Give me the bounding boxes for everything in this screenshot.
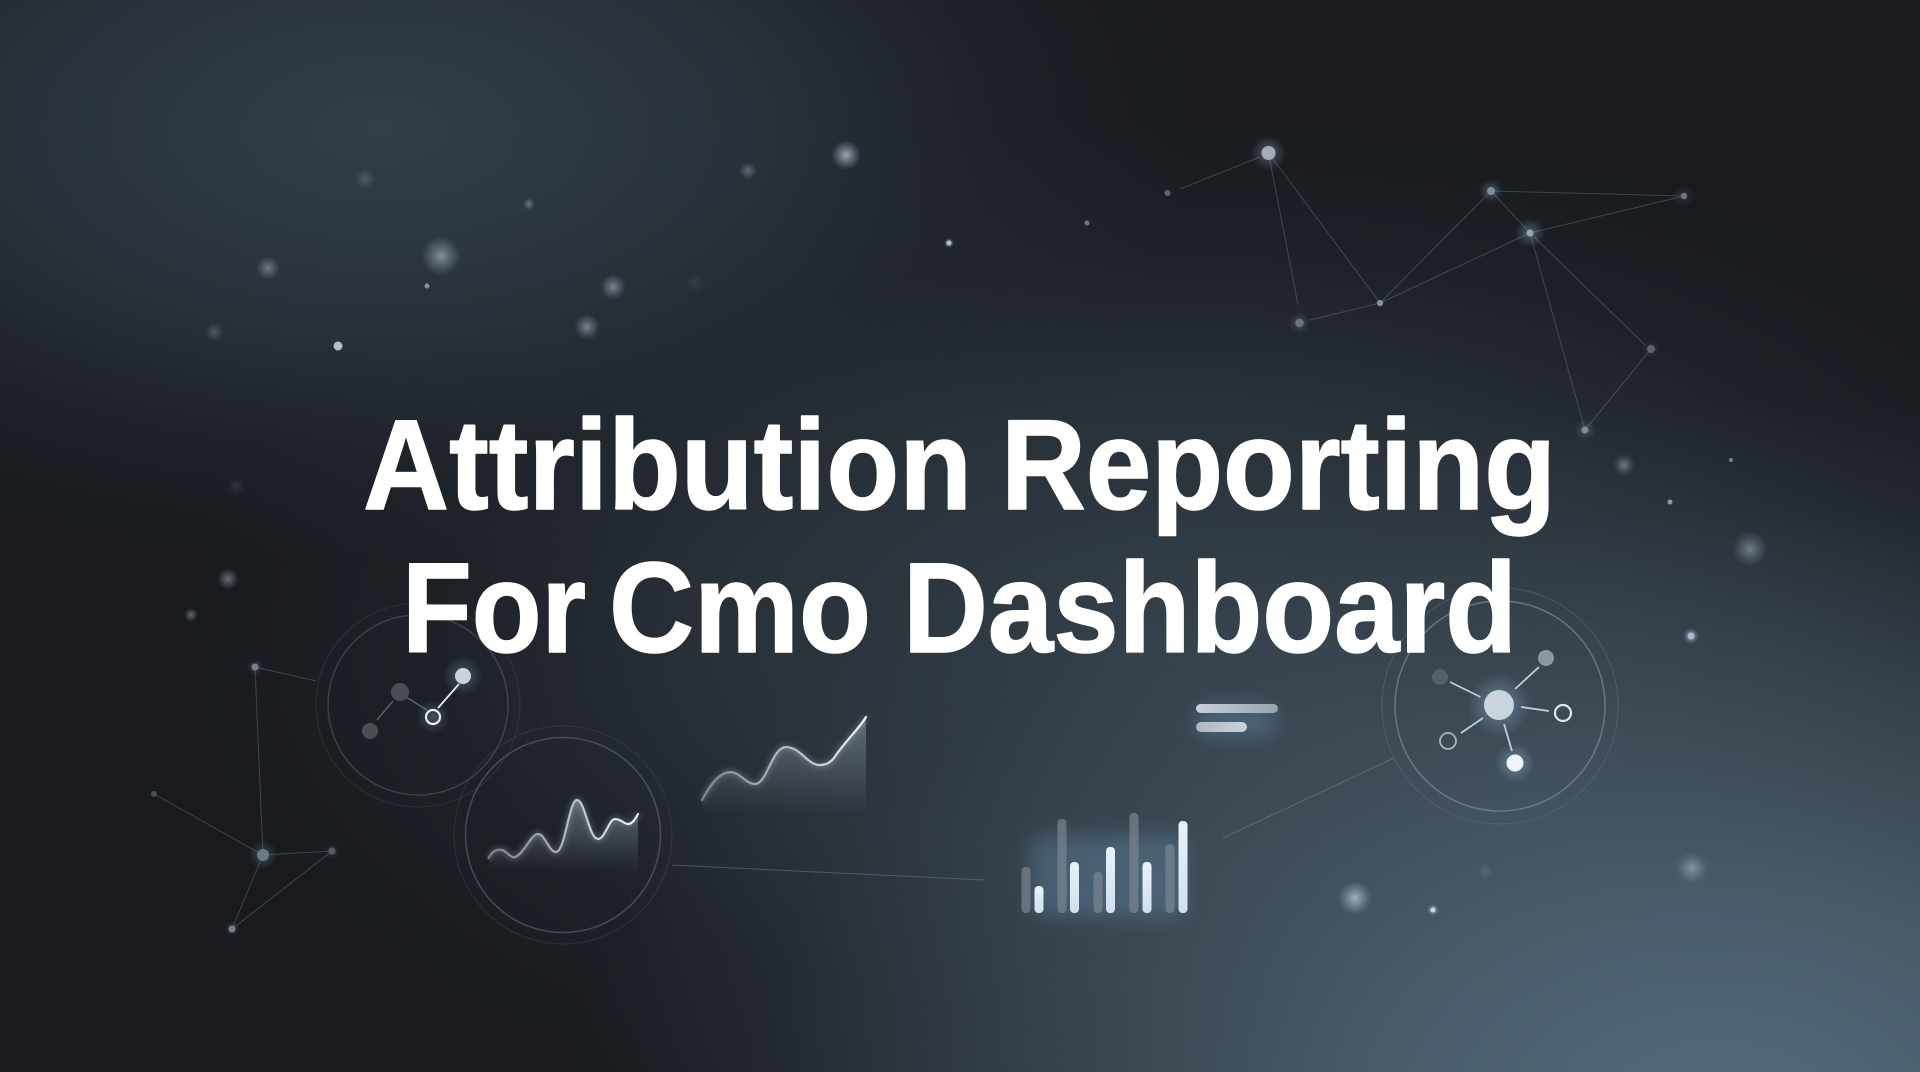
widget: bar chart [1022,813,1188,917]
dim bars [1022,813,1174,913]
widget: area chart [702,717,866,815]
sparkline rings [454,726,672,944]
title line 2: Cmo [609,537,871,680]
title line 1 [363,394,1556,537]
title line 1: Reporting [1001,394,1556,537]
title [363,394,1556,680]
widget: short legend bars [1196,704,1278,736]
widget: circular dot line chart [316,603,520,807]
connector lines between widgets [672,758,1394,880]
constellation: bottom left [151,659,340,937]
bright bars [1034,821,1188,913]
title line 2: Dashboard [903,537,1517,680]
title line 2: For [402,537,586,680]
hub rings [1382,588,1618,824]
chart rings [316,603,520,807]
scattered glowing particles [184,140,1768,916]
widget: circular sparkline chart [454,726,672,944]
widget: circular network hub [1382,588,1618,824]
constellation: top right [1164,135,1696,441]
title line 2 [402,537,1517,680]
title line 1: Attribution [363,394,972,537]
